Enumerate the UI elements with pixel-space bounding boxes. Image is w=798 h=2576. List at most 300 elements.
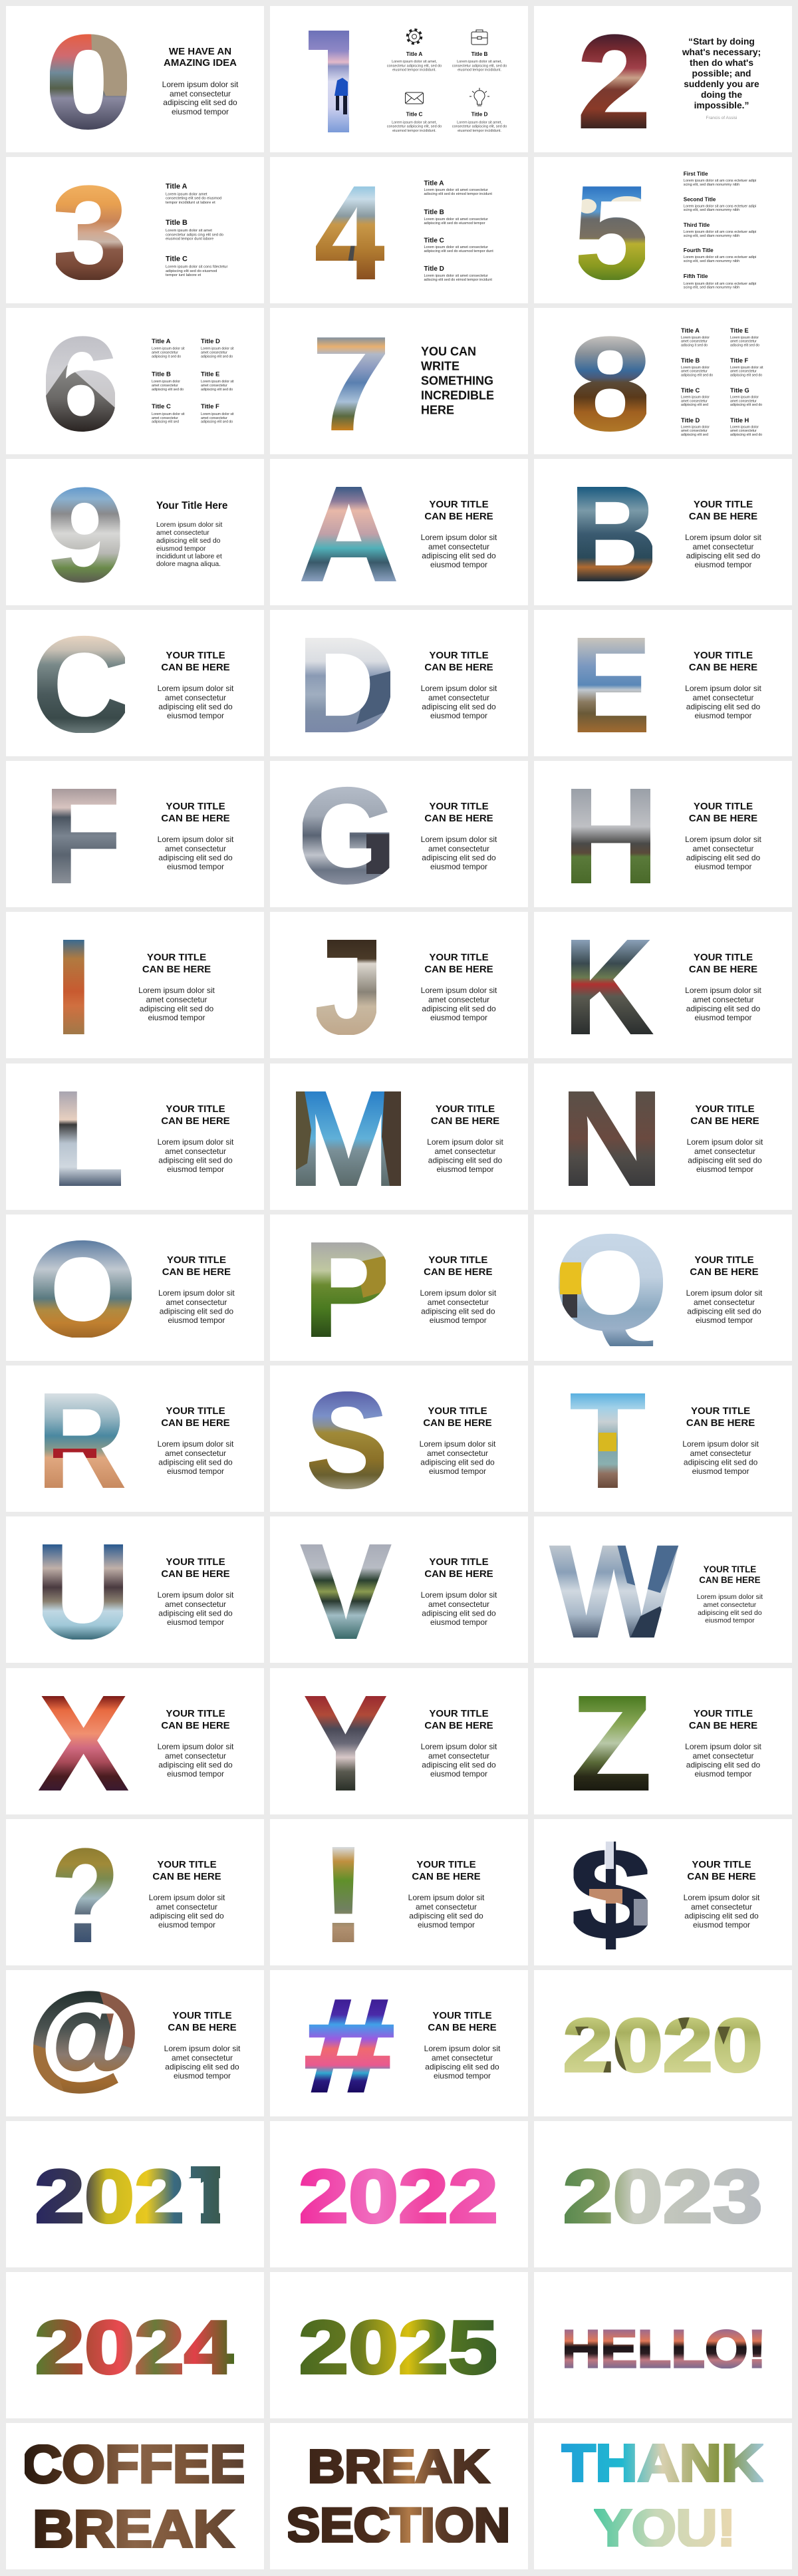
title: YOUR TITLE [429, 1708, 489, 1719]
body text: adipiscing elit sed do [686, 551, 761, 560]
body text: Lorem ipsum dolor sit [682, 1439, 759, 1449]
title: YOUR TITLE [692, 1859, 751, 1870]
items: adipiscing elit sed do eiusmod [166, 269, 217, 273]
panel: letter L [6, 1064, 264, 1210]
body text: amet consectetur [165, 1600, 226, 1609]
body text: adipiscing elit sed do [422, 853, 496, 862]
panel: thank you [534, 2423, 792, 2569]
body text: amet consectetur [427, 1449, 488, 1458]
panel: digit 5 [534, 157, 792, 303]
panel: letter U [6, 1516, 264, 1663]
body text: Lorem ipsum dolor sit [697, 1594, 763, 1601]
items: scing elit, sed diam nonummy nibh [684, 183, 739, 187]
body text: amet consectetur [428, 1600, 489, 1609]
items: amet consectetur [730, 429, 757, 433]
body text: adipiscing elit sed do [684, 1458, 758, 1467]
image letter O [33, 1240, 132, 1338]
body text: Lorem ipsum dolor sit [156, 521, 222, 529]
items: adipiscing elit sed do [152, 388, 184, 392]
body text: amet consectetur [704, 1602, 757, 1609]
items: adipiscing elit sed do eiusmod tempor [424, 221, 485, 225]
title: CAN BE HERE [428, 2022, 497, 2033]
body text: Lorem ipsum dolor sit [158, 1439, 234, 1449]
title: CAN BE HERE [699, 1575, 761, 1585]
body text: adipiscing elit sed do [158, 853, 233, 862]
body text: adipiscing elit sed do [150, 1912, 224, 1921]
title: YOUR TITLE [167, 1254, 226, 1266]
title: CAN BE HERE [689, 511, 757, 522]
feature: light bulb, Title D: Title D [471, 112, 488, 117]
headline: WRITE [421, 359, 460, 372]
body text: eiusmod tempor [705, 1618, 755, 1624]
image letter C [37, 635, 125, 733]
items: adiscing elit sed do eimod tempor incidunt [424, 192, 492, 196]
body text: adipiscing elit sed do [422, 702, 496, 712]
image year 2025 [301, 2317, 496, 2376]
items: scing elit, sed diam nonummy nibh [684, 286, 739, 290]
body text: Lorem ipsum dolor sit [420, 1439, 496, 1449]
body text: amet consectetur [165, 693, 226, 702]
items: Lorem ipsum dolor [730, 425, 759, 429]
body text: amet consectetur [692, 1751, 754, 1761]
items: scing elit, sed diam nonummy nibh [684, 234, 739, 238]
title: CAN BE HERE [424, 813, 493, 824]
items: adipiscing elit sed [152, 420, 179, 424]
body text: eiusmod tempor [430, 1013, 487, 1022]
panel: digit 9 [6, 459, 264, 605]
panel: letter S [270, 1365, 528, 1512]
body text: Lorem ipsum dolor sit [138, 986, 215, 995]
body text: amet consectetur [165, 1449, 226, 1458]
title: CAN BE HERE [687, 1871, 756, 1882]
image year 2024 [37, 2317, 234, 2376]
title: YOUR TITLE [429, 1556, 489, 1568]
title: YOUR TITLE [166, 1708, 225, 1719]
body text: Lorem ipsum dolor sit [421, 533, 497, 542]
body text: eiusmod tempor [430, 1769, 487, 1779]
title: CAN BE HERE [424, 511, 493, 522]
feature: gear, Title A [387, 29, 442, 72]
feature: briefcase, Title B: Title B [471, 51, 488, 57]
items: Title A [424, 180, 444, 188]
image letter L [59, 1091, 121, 1186]
body text: adipiscing elit sed do [158, 1156, 233, 1165]
items: Title F [201, 403, 219, 410]
body text: eiusmod tempor [167, 1618, 224, 1627]
body text: adipiscing elit sed do [686, 1760, 761, 1769]
items: Lorem ipsum dolor [730, 395, 759, 399]
body text: eiusmod tempor [172, 107, 229, 116]
feature: light bulb, Title D [452, 88, 507, 133]
body text: eiusmod tempor [693, 1920, 750, 1930]
items: Lorem ipsum dolor sit [152, 412, 185, 416]
body text: eiusmod tempor [434, 2071, 491, 2080]
items: Lorem ipsum dolor amet [166, 193, 207, 197]
title: CAN BE HERE [689, 964, 757, 975]
image letter R [45, 1393, 126, 1488]
image numeral 1 [309, 31, 349, 132]
image letter Q [559, 1231, 663, 1346]
body text: amet consectetur [432, 2053, 493, 2063]
title: YOUR TITLE [416, 1859, 476, 1870]
feature: envelope, Title C [387, 92, 442, 133]
quote: “Start by doing [688, 37, 755, 47]
title: CAN BE HERE [142, 964, 211, 975]
body text: adipiscing elit sed do [422, 1608, 496, 1618]
items: tempor iunt labore et [166, 273, 201, 277]
items: Lorem ipsum dolor sit am cons ectetuer adipi [684, 282, 756, 286]
body text: Lorem ipsum dolor sit [424, 2044, 501, 2053]
image words COFFEE BREAK [25, 2444, 244, 2548]
body text: Lorem ipsum dolor sit [687, 1137, 763, 1147]
panel: letter O [6, 1215, 264, 1361]
items: adipiscing elit sed do eiusmod tempor dunt [424, 249, 493, 253]
title: YOUR TITLE [429, 499, 489, 510]
title: YOUR TITLE [694, 1254, 754, 1266]
body text: Lorem ipsum dolor sit [158, 1742, 234, 1751]
title: YOUR TITLE [691, 1405, 750, 1417]
items: Title E [201, 371, 219, 378]
body text: Lorem ipsum dolor sit [421, 684, 497, 693]
items: Title D [201, 338, 220, 345]
image letter B [577, 487, 652, 581]
body text: adipiscing elit sed do [163, 98, 237, 107]
body text: adipiscing elit sed do [686, 1004, 761, 1014]
items: adiscing elit sed do [730, 343, 759, 347]
body text: eiusmod tempor [430, 862, 487, 871]
panel: letter G [270, 761, 528, 907]
panel: letter I [6, 912, 264, 1058]
items: Lorem ipsum dolor sit amet consectetur [424, 274, 488, 278]
body text: amet consectetur [165, 844, 226, 853]
image letter K [571, 940, 654, 1034]
body text: dolore magna aliqua. [156, 561, 221, 568]
items: amet consectetur [681, 340, 708, 344]
body text: amet consectetur [692, 844, 754, 853]
items: Lorem ipsum dolor sit [201, 347, 234, 351]
title: YOUR TITLE [695, 1103, 755, 1115]
body text: incididunt ut labore et [156, 553, 222, 560]
panel: year 2024 [6, 2272, 264, 2418]
quote attribution: Francis of Assisi [706, 116, 737, 120]
title: YOUR TITLE [432, 2010, 492, 2021]
items: amet consectetur [152, 416, 178, 420]
items: amet consectetur [681, 399, 708, 403]
body text: amet consectetur [690, 1449, 751, 1458]
image letter F [52, 789, 116, 883]
body text: Lorem ipsum dolor sit [158, 1137, 234, 1147]
image letter S [309, 1391, 384, 1490]
feature: envelope, Title C: eiusmod tempor incididunt. [392, 129, 436, 133]
panel: letter X [6, 1668, 264, 1814]
panel: letter A [270, 459, 528, 605]
image letter V [299, 1544, 392, 1639]
items: amet consectetur [152, 351, 178, 355]
panel: letter N [534, 1064, 792, 1210]
title: CAN BE HERE [689, 662, 757, 673]
panel: letter R [6, 1365, 264, 1512]
title: YOUR TITLE [166, 801, 225, 812]
body text: amet consectetur [170, 89, 231, 98]
items: Lorem ipsum dolor sit [201, 412, 234, 416]
panel: letter T [534, 1365, 792, 1512]
image letter Z [571, 1696, 650, 1790]
items: adipiscing elit sed [681, 403, 708, 407]
panel: digit 0 [6, 6, 264, 152]
quote: what's necessary; [682, 47, 761, 57]
body text: amet consectetur [166, 1298, 227, 1307]
items: amet consectetur [730, 340, 757, 344]
body text: eiusmod tempor [429, 1467, 486, 1476]
body text: eiusmod tempor [167, 1467, 224, 1476]
items: eiusmod tempor dunt labore [166, 237, 213, 241]
items: amet consectetur [201, 384, 227, 388]
body text: amet consectetur [428, 693, 489, 702]
image letter P [311, 1242, 386, 1337]
items: First Title [684, 171, 708, 177]
items: Title E [730, 327, 749, 334]
items: Title G [730, 387, 749, 394]
body text: Lorem ipsum dolor sit [421, 1590, 497, 1600]
body text: Lorem ipsum dolor sit [158, 1590, 234, 1600]
panel: digit 3 [6, 157, 264, 303]
body text: eiusmod tempor [418, 1920, 475, 1930]
title: WE HAVE AN [169, 46, 231, 57]
body text: eiusmod tempor [167, 1165, 224, 1174]
title: CAN BE HERE [689, 813, 757, 824]
items: Lorem ipsum dolor sit [730, 366, 763, 370]
title: CAN BE HERE [686, 1417, 755, 1429]
body text: amet consectetur [165, 1147, 226, 1156]
panel: letter E [534, 610, 792, 756]
title: AMAZING IDEA [164, 57, 237, 69]
items [424, 180, 493, 282]
panel: digit 6 [6, 308, 264, 454]
panel: letter P [270, 1215, 528, 1361]
image numeral 7 [317, 335, 385, 430]
panel: letter B [534, 459, 792, 605]
title: CAN BE HERE [431, 1115, 499, 1127]
items: Lorem ipsum dolor sit am cons ectetuer adipi [684, 255, 756, 259]
items: Third Title [684, 222, 710, 228]
items [166, 182, 228, 277]
body text: adipiscing elit sed do [428, 1156, 503, 1165]
items: adipiscing elit sed [681, 433, 708, 437]
items: adiscing it sed do [681, 343, 708, 347]
image numeral 3 [56, 185, 123, 280]
items: adipiscing elit sed do [681, 374, 713, 378]
body text: amet consectetur [434, 1147, 496, 1156]
panel: letter M [270, 1064, 528, 1210]
body text: amet consectetur [165, 1751, 226, 1761]
items: Title B [166, 219, 188, 227]
body text: Lorem ipsum dolor sit [686, 1288, 763, 1298]
items: adipiscing elit sed do [201, 388, 233, 392]
image numeral 8 [574, 333, 646, 432]
items: Lorem ipsum dolor sit am cons ectetuer adipi [684, 179, 756, 183]
items: amet consectetur [152, 384, 178, 388]
body text: Lorem ipsum dolor sit [149, 1893, 225, 1902]
image letter M [296, 1091, 401, 1186]
panel: letter F [6, 761, 264, 907]
panel: letter W [534, 1516, 792, 1663]
body text: eiusmod tempor [148, 1013, 205, 1022]
title: CAN BE HERE [152, 1871, 221, 1882]
body text: Lorem ipsum dolor sit [408, 1893, 485, 1902]
items: Lorem ipsum dolor sit am cons ectetuer adipi [684, 205, 756, 209]
body text: adipiscing elit sed do [158, 1608, 233, 1618]
body text: adipiscing elit sed do [688, 1156, 762, 1165]
title: YOUR TITLE [166, 1405, 225, 1417]
image numeral 2 [579, 31, 646, 128]
body text: adipiscing elit sed do [421, 1306, 495, 1316]
title: YOUR TITLE [166, 1103, 225, 1115]
panel: letter J [270, 912, 528, 1058]
body text: eiusmod tempor [430, 1618, 487, 1627]
body text: Lorem ipsum dolor sit [421, 1742, 497, 1751]
body text: adipiscing elit sed do [409, 1912, 483, 1921]
body text: Lorem ipsum dolor sit [158, 684, 234, 693]
feature: briefcase, Title B: consectetur adipiscing elit, sed do [452, 64, 507, 68]
body text: eiusmod tempor [692, 1467, 749, 1476]
body text: amet consectetur [428, 1298, 489, 1307]
body text: eiusmod tempor [174, 2071, 231, 2080]
panel: digit 2 with quote [534, 6, 792, 152]
panel: letter D [270, 610, 528, 756]
items: amet consectetur [201, 351, 227, 355]
feature: gear, Title A: Title A [406, 51, 422, 57]
title: CAN BE HERE [689, 1720, 757, 1731]
items: scing elit, sed diam nonummy nibh [684, 208, 739, 212]
image year 2020 [565, 2015, 761, 2073]
image letter Y [303, 1696, 388, 1790]
body text: amet consectetur [172, 2053, 233, 2063]
body text: eiusmod tempor [694, 711, 752, 720]
body text: amet consectetur [691, 1902, 752, 1912]
body text: Lorem ipsum dolor sit [420, 1288, 497, 1298]
title: CAN BE HERE [424, 1266, 492, 1278]
title: CAN BE HERE [161, 1720, 230, 1731]
panel: hash sign [270, 1970, 528, 2116]
items: Lorem ipsum dolor sit cons fdectetur [166, 265, 228, 269]
panel: letter Y [270, 1668, 528, 1814]
image numeral 5 [578, 185, 645, 280]
image letter 0 [50, 31, 127, 130]
body text: eiusmod tempor [696, 1316, 753, 1325]
body text: eiusmod tempor [694, 1013, 752, 1022]
feature: envelope, Title C: Title C [406, 112, 423, 117]
items: Lorem ipsum dolor [681, 336, 710, 340]
items [152, 338, 234, 424]
body text: amet consectetur [146, 995, 207, 1004]
body text: amet consectetur [156, 529, 209, 537]
image year 2022 [301, 2166, 496, 2224]
items: Lorem ipsum dolor [730, 336, 759, 340]
feature: briefcase, Title B: eiusmod tempor incididunt. [458, 69, 501, 72]
items: adipiscing elit sed do [201, 355, 233, 358]
panel: year 2023 [534, 2121, 792, 2267]
items: adipiscing elit sed do [730, 433, 762, 437]
image word HELLO! [565, 2329, 762, 2368]
items: Second Title [684, 197, 716, 202]
items: amet consectetur [730, 399, 757, 403]
body text: amet consectetur [694, 1298, 755, 1307]
feature: gear, Title A: consectetur adipiscing elit, sed do [387, 64, 442, 68]
title: CAN BE HERE [424, 662, 493, 673]
body text: amet consectetur [416, 1902, 477, 1912]
panel: letter C [6, 610, 264, 756]
title: YOUR TITLE [166, 650, 225, 661]
title: YOUR TITLE [429, 650, 489, 661]
items: amet consectetur [201, 416, 227, 420]
image numeral 4 [315, 185, 384, 279]
body text: eiusmod tempor [694, 862, 752, 871]
items: Lorem ipsum dolor sit [201, 380, 234, 384]
items: Title F [730, 357, 749, 364]
title: CAN BE HERE [424, 1568, 493, 1580]
feature: envelope, Title C: consectetur adipiscing elit, sed do [387, 125, 442, 129]
body text: adipiscing elit sed do [698, 1610, 762, 1617]
feature: light bulb, Title D: consectetur adipiscing elit, sed do [452, 125, 507, 129]
items: Lorem ipsum dolor [152, 380, 180, 384]
body text: amet consectetur [692, 542, 754, 551]
body text: eiusmod tempor [156, 545, 206, 553]
items: Title D [681, 417, 700, 424]
body text: amet consectetur [156, 1902, 217, 1912]
image letter E [578, 638, 646, 732]
quote: impossible.” [694, 100, 749, 110]
body text: adipiscing elit sed do [160, 1306, 233, 1316]
items: Lorem ipsum dolor sit [152, 347, 185, 351]
feature: light bulb, Title D: Lorem ipsum dolor sit amet, [457, 120, 502, 124]
title: YOUR TITLE [429, 801, 489, 812]
body text: Lorem ipsum dolor sit [685, 1742, 762, 1751]
panel: letter K [534, 912, 792, 1058]
items: tempor incididunt ut labore et [166, 201, 215, 205]
body text: adipiscing elit sed do [687, 1306, 761, 1316]
panel: at sign [6, 1970, 264, 2116]
panel: dollar sign [534, 1819, 792, 1965]
items: Title A [152, 338, 171, 345]
title: CAN BE HERE [423, 1417, 492, 1429]
items: adipiscing elit sed do [201, 420, 233, 424]
headline: INCREDIBLE [421, 388, 494, 402]
panel: year 2025 [270, 2272, 528, 2418]
title: CAN BE HERE [168, 2022, 237, 2033]
body text: eiusmod tempor [430, 1316, 487, 1325]
items: Title B [152, 371, 171, 378]
image hash sign [305, 1995, 394, 2092]
title: YOUR TITLE [694, 801, 753, 812]
items: amet consectetur [730, 370, 757, 374]
items: Title C [152, 403, 171, 410]
title: CAN BE HERE [424, 964, 493, 975]
title: CAN BE HERE [161, 1115, 230, 1127]
title: YOUR TITLE [428, 1405, 487, 1417]
body text: adipiscing elit sed do [425, 2062, 499, 2071]
items: Title D [424, 265, 444, 273]
body text: eiusmod tempor [168, 1316, 225, 1325]
body text: adipiscing elit sed do [422, 1004, 496, 1014]
body text: eiusmod tempor [694, 1769, 752, 1779]
items: Title A [681, 327, 700, 334]
title: CAN BE HERE [424, 1720, 493, 1731]
image letter N [569, 1091, 655, 1186]
image letter I [63, 940, 84, 1034]
body text: adipiscing elit sed do [686, 702, 761, 712]
panel: hello [534, 2272, 792, 2418]
items: Title C [166, 255, 188, 263]
